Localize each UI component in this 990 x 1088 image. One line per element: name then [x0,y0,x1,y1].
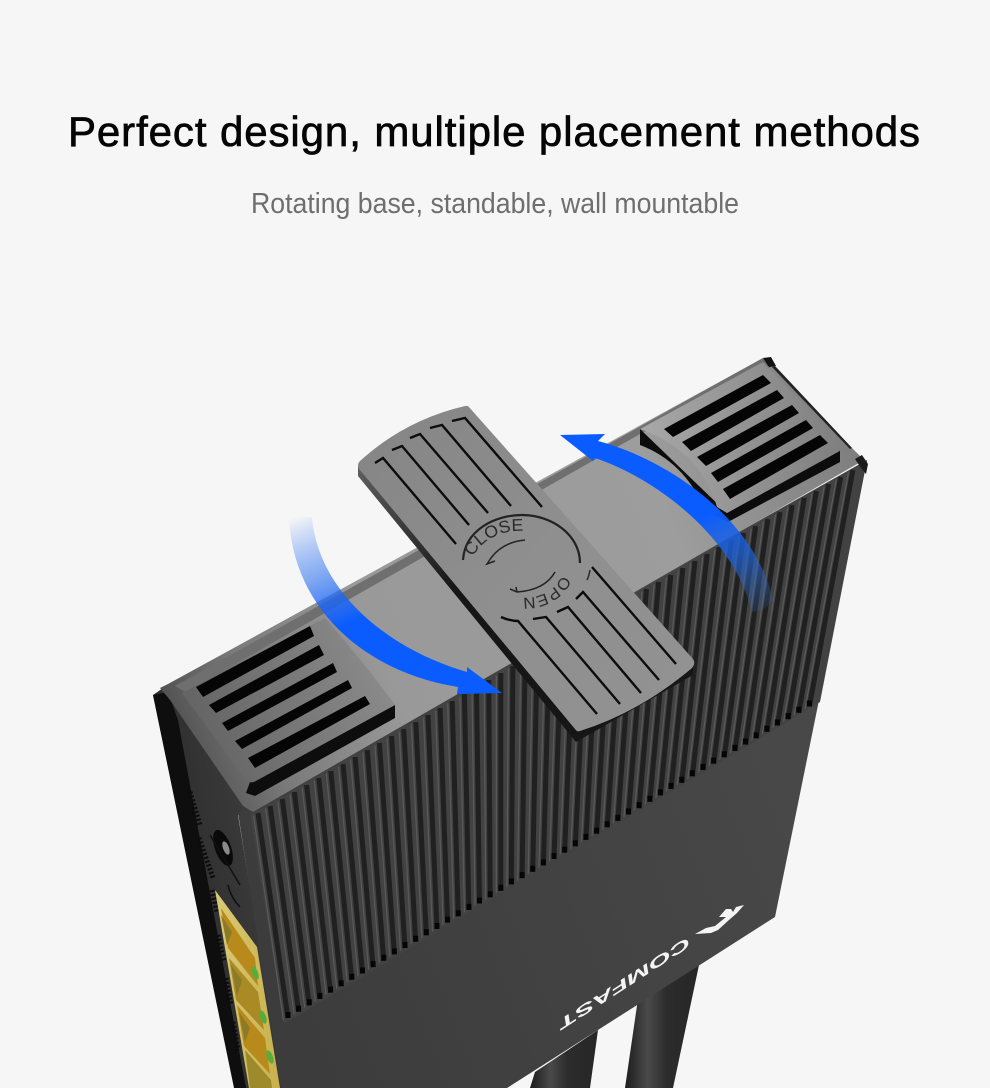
icon: open direction arrow [510,572,555,592]
ribbed heat sink [250,460,867,1024]
label: CLOSE: CLOSE [466,519,523,554]
label: OPEN: OPEN [524,578,570,609]
left vent pad [182,618,395,796]
side panel with ports [153,686,283,1088]
brand logo [553,905,744,1034]
router illustration [153,357,868,1088]
arrow: rotation clockwise into base [289,517,502,694]
right vent pad [640,362,850,522]
upper arm grooves [375,418,542,544]
antennas [530,965,699,1088]
brand name: COMFAST [553,934,694,1034]
top face [160,357,868,812]
rotating base plate [358,406,694,742]
title: Perfect design, multiple placement methods [68,108,920,155]
icon: close direction arrow [487,540,525,564]
rotary dial [462,514,591,609]
subtitle: Rotating base, standable, wall mountable [251,188,739,220]
icon: Comfast logo [695,905,744,934]
lower arm grooves [501,567,676,714]
ethernet ports [215,890,280,1088]
icon: power jack [209,827,240,907]
front face [238,460,867,1088]
arrow: rotation counter-clockwise [560,434,773,612]
